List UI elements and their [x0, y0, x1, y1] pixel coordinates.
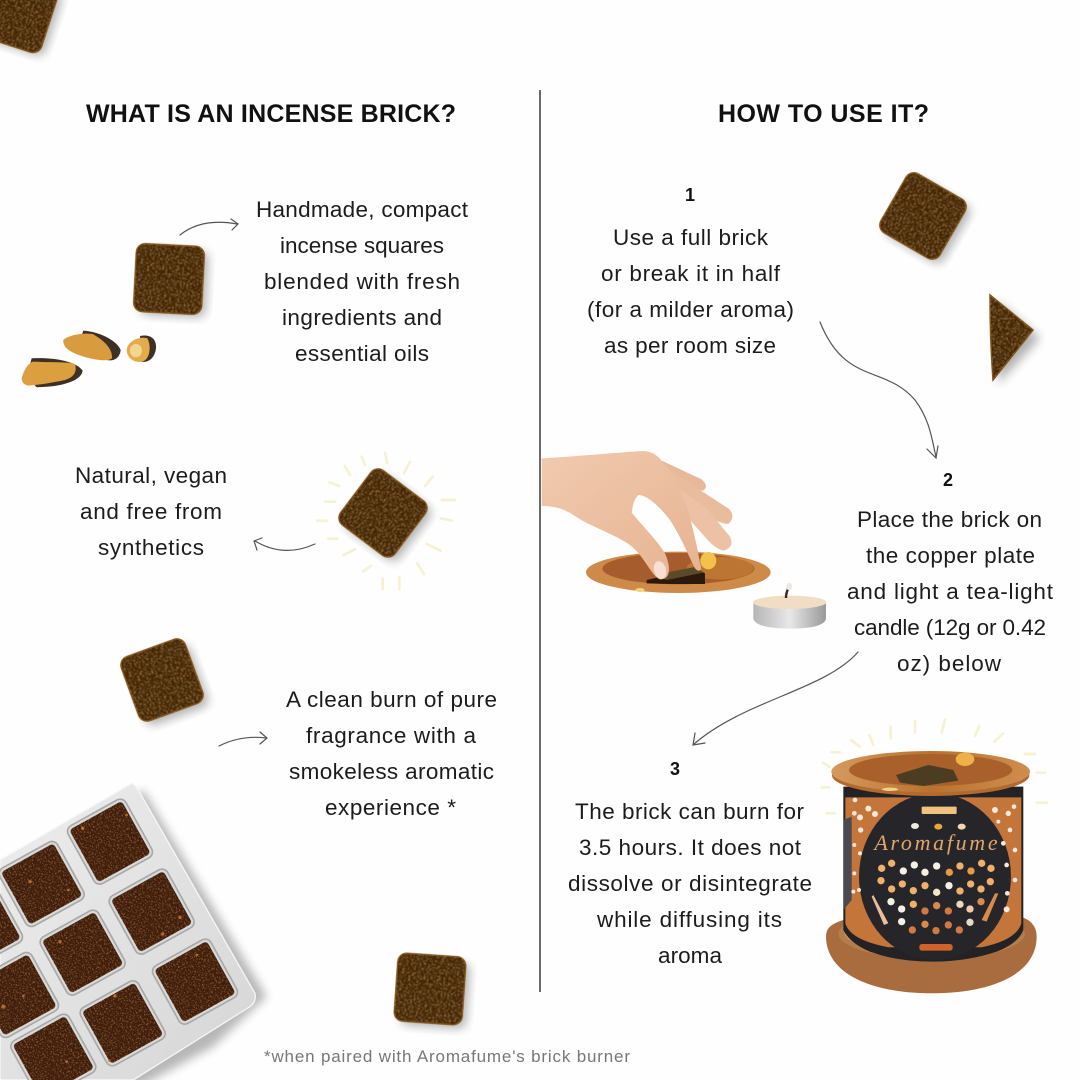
text block: step 2	[847, 507, 1054, 676]
arrow: to handmade text	[180, 219, 238, 235]
arrow: step 2 to step 3	[693, 652, 858, 745]
tray body	[0, 783, 255, 1080]
icon: brick near clean burn	[118, 636, 210, 727]
heading: how to use it: HOW TO USE IT?	[718, 100, 929, 128]
image: hand placing brick on copper plate	[542, 451, 771, 593]
text block: clean burn: smokeless aromatic	[289, 759, 494, 784]
text block: clean burn: A clean burn of pure	[286, 687, 497, 712]
step 2 number: 2	[943, 470, 953, 490]
arrow: step 1 to step 2	[820, 322, 938, 458]
cut-out holes	[877, 823, 995, 934]
text block: step 2: the copper plate	[866, 543, 1035, 568]
burner body	[843, 787, 1023, 962]
text block: clean burn: fragrance with a	[306, 723, 476, 748]
brick on plate	[647, 568, 705, 584]
text block: natural vegan: and free from	[80, 499, 222, 524]
icon: full brick	[877, 170, 973, 266]
footnote: *when paired with Aromafume's brick burner	[264, 1047, 630, 1066]
text block: step 1: Use a full brick	[613, 225, 769, 250]
heading: what is an incense brick: WHAT IS AN INCENSE BRICK?	[86, 100, 456, 128]
text block: step 2: candle (12g or 0.42	[854, 615, 1046, 640]
brand text: Aromafume	[872, 830, 998, 855]
side dots	[851, 798, 1017, 912]
image: tea-light candle	[753, 583, 826, 629]
step 1 number: 1	[685, 185, 695, 205]
saucer	[826, 909, 1037, 993]
text block: step 3: aroma	[658, 943, 722, 968]
text block: step 3: dissolve or disintegrate	[568, 871, 812, 896]
text block: clean burn: experience *	[325, 795, 456, 820]
image: aromafume brick burner	[822, 719, 1047, 993]
icon: glowing brick	[317, 453, 455, 589]
arrow: to natural vegan text	[254, 538, 315, 550]
text block: handmade squares: essential oils	[295, 341, 429, 366]
text block: handmade squares: incense squares	[280, 233, 444, 258]
sun rays	[317, 453, 455, 589]
icon: corner brick top left	[0, 0, 64, 58]
icon: resin pieces	[22, 331, 156, 387]
text block: step 1: as per room size	[604, 333, 776, 358]
icon: half brick	[990, 295, 1040, 384]
hand	[542, 451, 732, 580]
text block: step 2: oz) below	[897, 651, 1002, 676]
text block: natural vegan: synthetics	[98, 535, 204, 560]
text block: handmade squares	[256, 197, 469, 366]
slots	[922, 807, 957, 814]
brick on burner	[896, 765, 958, 786]
step 3 number: 3	[670, 759, 680, 779]
text block: step 3: 3.5 hours. It does not	[579, 835, 802, 860]
text block: handmade squares: blended with fresh	[264, 269, 460, 294]
glow rays	[822, 719, 1047, 813]
text block: handmade squares: ingredients and	[282, 305, 442, 330]
text block: step 3: while diffusing its	[596, 907, 782, 932]
text block: step 1: (for a milder aroma)	[587, 297, 794, 322]
icon: brick bottom centre	[394, 953, 470, 1029]
icon: brick with resin pieces	[22, 243, 209, 387]
text block: natural vegan: Natural, vegan	[75, 463, 227, 488]
copper plate	[586, 552, 771, 593]
text block: step 2: Place the brick on	[857, 507, 1042, 532]
text block: handmade squares: Handmade, compact	[256, 197, 469, 222]
text block: step 3	[568, 799, 812, 968]
text block: step 2: and light a tea-light	[847, 579, 1054, 604]
tray bricks	[0, 797, 240, 1080]
tray speckles	[1, 814, 198, 1063]
image: blister tray of bricks	[0, 783, 267, 1080]
text block: step 1: or break it in half	[601, 261, 781, 286]
text block: step 3: The brick can burn for	[575, 799, 804, 824]
text block: step 1	[587, 225, 794, 358]
tray shadow	[0, 790, 267, 1080]
text block: clean burn	[286, 687, 497, 820]
text block: natural vegan	[75, 463, 227, 560]
arrow: to clean burn text	[219, 732, 267, 746]
copper rim and plate	[831, 751, 1030, 796]
centre divider	[539, 90, 541, 992]
